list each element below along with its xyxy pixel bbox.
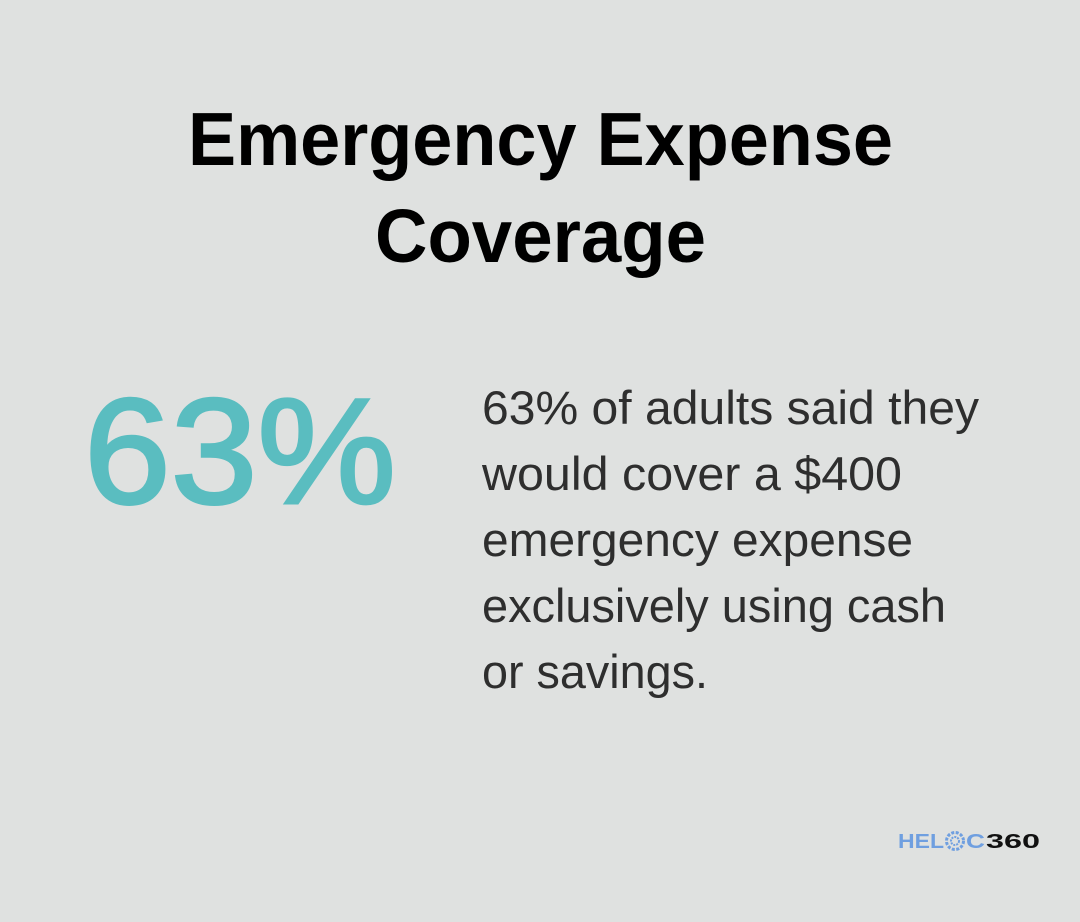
description text: or savings. [482, 645, 708, 698]
logo: HELOC360: 360 [986, 831, 1040, 853]
description text: emergency expense [482, 513, 913, 566]
title: Coverage [375, 194, 706, 278]
logo: HELOC360 [898, 831, 1040, 853]
big statistic: 63% [84, 367, 396, 535]
title: Emergency Expense [188, 97, 893, 181]
icon: logo swirl [946, 832, 964, 850]
logo: HELOC360: C [966, 831, 985, 853]
description text: 63% of adults said they [482, 381, 979, 434]
description text [481, 381, 979, 698]
logo: HELOC360: HEL [898, 831, 944, 853]
title [188, 97, 893, 278]
description text: exclusively using cash [482, 579, 946, 632]
description text: would cover a $400 [481, 447, 902, 500]
